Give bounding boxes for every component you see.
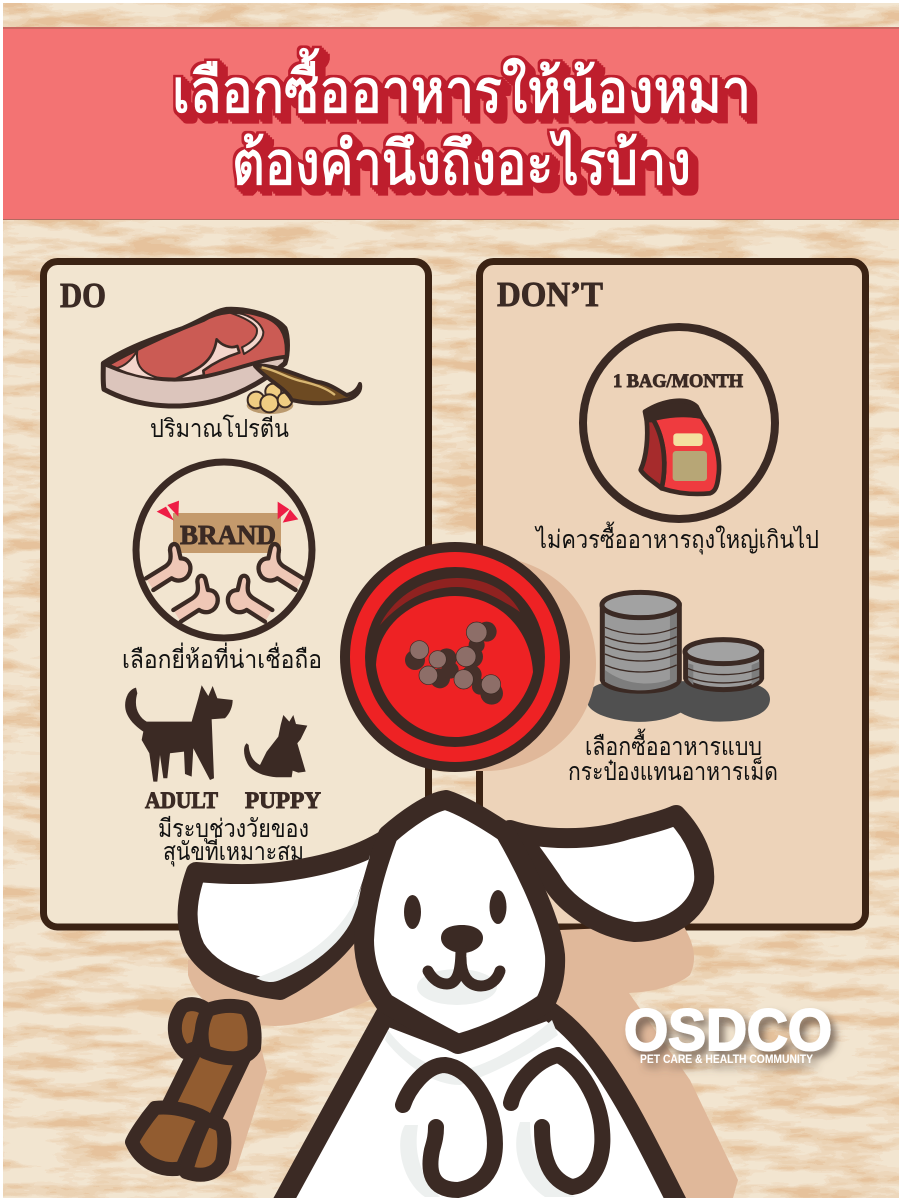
title text	[172, 48, 751, 197]
panel: don't	[480, 262, 866, 927]
caption: age range: มีระบุช่วงวัยของ	[158, 815, 309, 844]
heading: do: DO	[60, 276, 106, 315]
icon: bone	[132, 1004, 267, 1178]
bowl inner	[376, 596, 533, 737]
icon: food bag	[641, 401, 719, 494]
heading: don't: DON’T	[497, 275, 603, 314]
left paw	[403, 1065, 495, 1190]
dog shadow	[188, 925, 738, 1198]
icon: steak and soybeans	[103, 309, 360, 414]
title text: ต้องคำนึงถึงอะไรบ้าง	[232, 129, 691, 197]
logo: OSDCO: PET CARE & HEALTH COMMUNITY	[640, 1054, 813, 1066]
brand sign	[173, 513, 281, 553]
caption: age range	[158, 815, 309, 867]
left ear	[188, 838, 388, 990]
icon: brand circle	[136, 462, 312, 638]
chin shading	[417, 969, 497, 1005]
icon: bag circle	[583, 327, 775, 519]
dog body	[275, 1010, 684, 1200]
bowl shadow	[455, 557, 596, 771]
panel: do	[44, 262, 428, 927]
caption: cans	[568, 728, 778, 786]
logo: OSDCO: OSDCO	[624, 998, 832, 1063]
caption: protein: ปริมาณโปรตีน	[150, 414, 289, 443]
ear shading	[256, 855, 370, 982]
thumbs up hands	[146, 544, 303, 622]
icon: food bowl	[345, 547, 565, 767]
brand sign: BRAND	[180, 520, 276, 550]
left eye	[404, 895, 421, 929]
caption: cans: เลือกซื้ออาหารแบบ	[585, 728, 762, 761]
head	[364, 800, 555, 1044]
caption: age range: สุนัขที่เหมาะสม	[163, 834, 304, 867]
label: 1 bag per month: 1 BAG/MONTH	[613, 371, 743, 392]
icon: adult dog	[125, 685, 233, 782]
caption: cans: กระป๋องแทนอาหารเม็ด	[568, 756, 778, 786]
right eye	[490, 890, 506, 924]
title text: เลือกซื้ออาหารให้น้องหมา	[172, 48, 751, 125]
title banner	[3, 27, 899, 220]
right paw	[511, 1055, 602, 1187]
label: adult: ADULT	[145, 788, 218, 813]
bottom edge	[0, 1198, 900, 1200]
body shading	[385, 1020, 575, 1197]
label: puppy: PUPPY	[245, 788, 321, 813]
nose	[441, 925, 483, 953]
icon: cans	[587, 592, 770, 722]
red marks	[157, 501, 298, 523]
kibble	[405, 622, 503, 705]
caption: brand: เลือกยี่ห้อที่น่าเชื่อถือ	[122, 642, 322, 674]
icon: puppy	[244, 715, 307, 777]
mascot dog	[188, 800, 704, 1200]
caption: big bag: ไม่ควรซื้ออาหารถุงใหญ่เกินไป	[534, 521, 819, 555]
right ear	[510, 815, 704, 932]
mouth	[428, 948, 500, 986]
